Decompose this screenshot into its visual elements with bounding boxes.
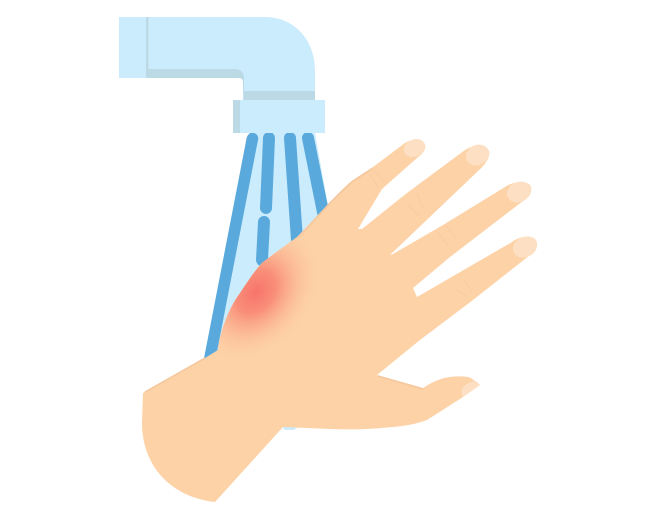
stream 2 upper: [266, 138, 269, 208]
water residue below wrist: [281, 426, 299, 430]
fingernail: middle: [462, 141, 493, 169]
water spray: [208, 133, 332, 430]
stream 2 lower: [262, 222, 264, 260]
illustration: hand with red patch under a running tap: [119, 17, 538, 502]
collar: [233, 100, 325, 133]
hand silhouette: [142, 140, 537, 502]
fingernail: ring: [503, 178, 535, 206]
pipe joint line: [146, 17, 148, 78]
redness patch: [220, 240, 306, 346]
pipe shadow underside: [146, 69, 244, 91]
fingernail: index: [401, 136, 428, 160]
collar shadow: [233, 100, 240, 133]
pipe lower shadow: [244, 91, 315, 100]
hand: [142, 136, 541, 502]
stream 4: [308, 138, 325, 222]
hand edge shading: [145, 168, 423, 392]
stream 3: [290, 138, 297, 240]
stream 1: [208, 138, 252, 368]
water background: [208, 133, 332, 352]
thumbnail: [461, 381, 480, 397]
fingernail: little: [509, 233, 541, 261]
knuckle creases: [369, 170, 472, 297]
faucet pipe: [119, 17, 315, 100]
faucet: [119, 17, 325, 133]
